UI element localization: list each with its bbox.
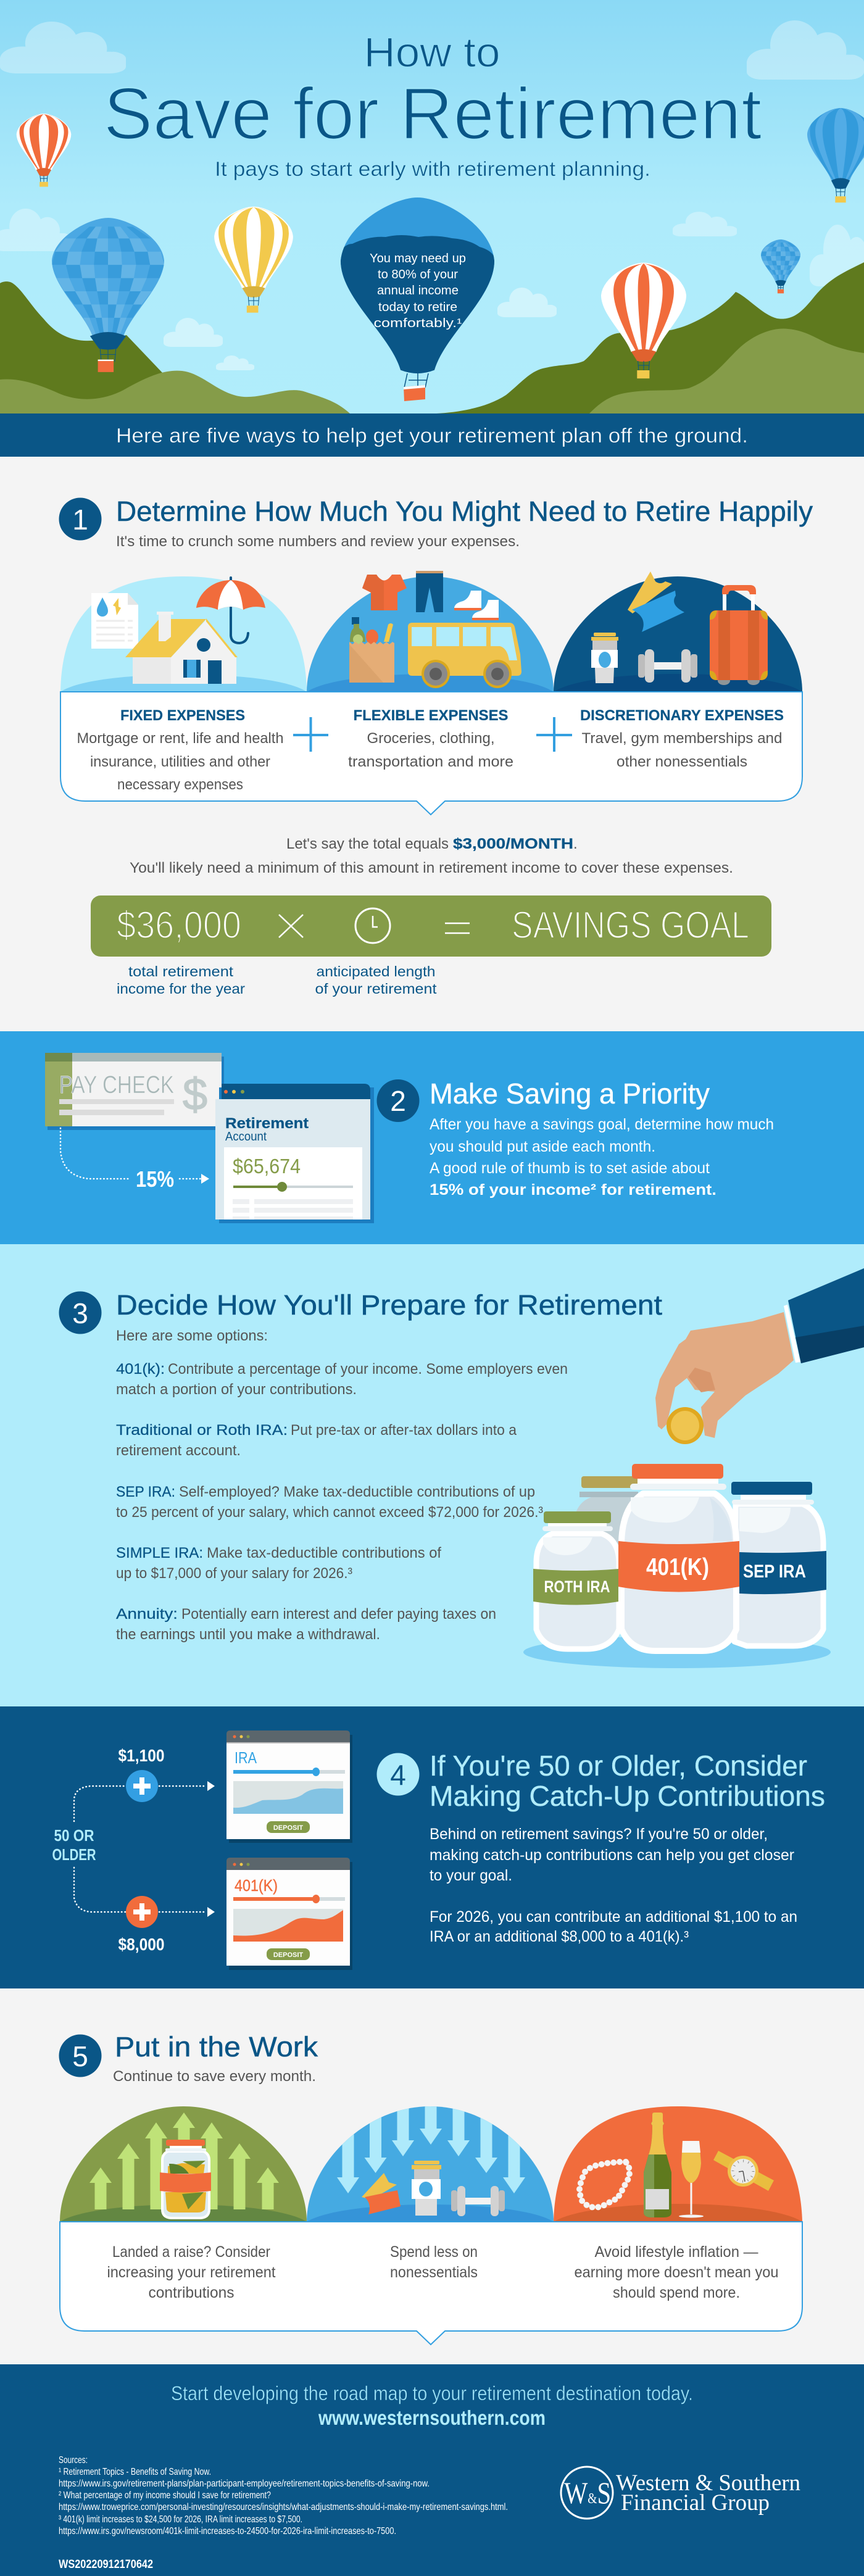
option: 401(k): Contribute a percentage of your income. Some employers even	[168, 1361, 568, 1377]
logo	[561, 2467, 800, 2519]
panel: hero sky	[0, 0, 864, 413]
step 4 body: to your goal.	[430, 1867, 512, 1884]
step 1 subheading: It's time to crunch some numbers and review your expenses.	[116, 533, 520, 550]
flexible expenses text: transportation and more	[348, 754, 513, 770]
jar: 401(k): 401(K)	[646, 1554, 709, 1581]
sources: https://www.irs.gov/newsroom/401k-limit-increases-to-24500-for-2026-ira-limit-increases-to-7500.	[59, 2526, 396, 2537]
balloon: yellow stripes	[215, 207, 292, 313]
sources: ² What percentage of my income should I save for retirement?	[59, 2490, 271, 2501]
savings goal formula bar	[91, 895, 771, 957]
tip: lifestyle inflation: earning more doesn't mean you	[574, 2264, 779, 2281]
icon: tickets	[362, 2173, 401, 2214]
savings goal formula bar: SAVINGS GOAL	[512, 904, 749, 947]
caption: retirement length: of your retirement	[315, 981, 437, 997]
jar: SEP IRA	[731, 1482, 826, 1646]
panel: step 5	[59, 2034, 803, 2345]
step 5 number	[59, 2034, 101, 2077]
option: Annuity	[116, 1606, 496, 1643]
step 4 heading: Making Catch-Up Contributions	[430, 1780, 825, 1812]
flexible expenses text	[348, 707, 513, 770]
step 4 number	[376, 1753, 420, 1796]
step 3 subheading: Here are some options:	[116, 1327, 268, 1344]
step 3 number: 3	[72, 1297, 88, 1329]
icon: grocery bag	[349, 617, 394, 683]
step 5 number: 5	[72, 2040, 88, 2072]
total explanation: $3,000/MONTH	[453, 836, 573, 852]
tip: spend less	[390, 2243, 478, 2281]
retirement account window: Account	[225, 1130, 267, 1144]
cloud far right	[810, 225, 864, 286]
banner: Here are five ways to help get your retirement plan off the ground.	[116, 424, 748, 447]
icon: bus	[408, 623, 521, 688]
step 2 body: 15% of your income² for retirement.	[430, 1181, 717, 1199]
icon: champagne bottle	[644, 2113, 671, 2217]
icon: champagne glass	[679, 2141, 704, 2218]
dome: fixed expenses	[60, 576, 307, 692]
icon: tickets	[628, 571, 684, 632]
fixed expenses text	[77, 707, 284, 793]
cloud top right	[747, 20, 864, 80]
step 2 number: 2	[390, 1085, 406, 1117]
icon: orange plus	[126, 1896, 158, 1928]
dome: discretionary expenses	[554, 571, 802, 692]
website: www.westernsouthern.com	[318, 2406, 546, 2429]
step 1 number: 1	[72, 504, 88, 536]
panel: footer	[0, 2364, 864, 2576]
hill: right light	[589, 328, 864, 413]
option: Annuity: the earnings until you make a withdrawal.	[116, 1626, 380, 1643]
step 4 body: Behind on retirement savings? If you're 50 or older,	[430, 1826, 768, 1843]
balloon: large blue checker	[52, 218, 164, 372]
icon: times	[279, 915, 303, 937]
step 2 number	[376, 1079, 420, 1122]
icon: coffee cup	[591, 633, 618, 683]
icon: trousers	[416, 571, 443, 612]
step 3 number	[59, 1291, 101, 1334]
hill: left light	[0, 371, 350, 413]
option: SEP IRA: to 25 percent of your salary, which cannot exceed $72,000 for 2026.³	[116, 1504, 543, 1521]
balloon: central navy with text	[341, 197, 494, 401]
option: SIMPLE IRA: Make tax-deductible contributions of	[207, 1545, 441, 1561]
pay check illustration: $	[183, 1070, 207, 1120]
flexible expenses text: FLEXIBLE EXPENSES	[353, 707, 509, 724]
illustration: hand dropping coin	[655, 1268, 864, 1444]
icon: watch	[713, 2151, 774, 2191]
total explanation: You'll likely need a minimum of this amount in retirement income to cover these expenses.	[130, 860, 733, 876]
step 4 body: making catch-up contributions can help you get closer	[430, 1847, 794, 1864]
option: 401(k): match a portion of your contributions.	[116, 1381, 357, 1398]
balloon text: to 80% of your	[378, 268, 458, 281]
tip: spend less: nonessentials	[390, 2264, 478, 2281]
balloon: top right blue stripes	[807, 108, 864, 202]
total explanation: .	[573, 836, 578, 852]
label: 50 or older: 50 OR	[54, 1826, 94, 1845]
cloud centre right	[497, 288, 557, 317]
arrows: lower path	[74, 1868, 215, 1917]
step 2 body: A good rule of thumb is to set aside about	[430, 1160, 710, 1177]
document code: WS20220912170642	[59, 2558, 153, 2571]
option: Annuity: Potentially earn interest and defer paying taxes on	[181, 1606, 496, 1622]
logo: Financial Group	[621, 2490, 770, 2516]
window: IRA	[226, 1730, 352, 1843]
balloon: large orange stripes	[602, 264, 685, 378]
balloon text: comfortably.¹	[374, 317, 462, 330]
hill: left dark	[0, 281, 164, 413]
step 4 body: For 2026, you can contribute an additional $1,100 to an	[430, 1908, 797, 1926]
call to action: Start developing the road map to your retirement destination today.	[171, 2382, 693, 2404]
sources	[59, 2455, 508, 2537]
step 4 heading: If You're 50 or Older, Consider	[430, 1750, 807, 1782]
sources: ¹ Retirement Topics - Benefits of Saving Now.	[59, 2467, 211, 2477]
jar: Roth IRA	[533, 1511, 619, 1649]
jar: Roth IRA: ROTH IRA	[544, 1577, 610, 1596]
icon: plus 1	[293, 717, 328, 752]
option: SEP IRA	[116, 1484, 543, 1521]
panel: step 2	[0, 1031, 864, 1244]
jar: 401(k)	[618, 1464, 739, 1651]
option: SEP IRA: Self-employed? Make tax-deductible contributions of up	[179, 1484, 535, 1500]
hill: right dark	[436, 262, 864, 413]
icon: coffee cup	[412, 2161, 441, 2216]
icon: dumbbell	[451, 2186, 505, 2216]
step 2 body: you should put aside each month.	[430, 1138, 655, 1155]
banner	[0, 413, 864, 457]
icon: clock	[355, 908, 390, 943]
dome: spend less	[307, 2098, 554, 2222]
step 1 number	[59, 497, 101, 541]
option: SIMPLE IRA: SIMPLE IRA:	[116, 1545, 203, 1561]
subtitle: It pays to start early with retirement planning.	[215, 157, 650, 180]
step 5 heading: Put in the Work	[115, 2031, 318, 2063]
discretionary expenses text: DISCRETIONARY EXPENSES	[580, 707, 784, 724]
arrow: paycheck to account	[60, 1128, 209, 1184]
total explanation	[130, 836, 733, 876]
step 4 body: IRA or an additional $8,000 to a 401(k).³	[430, 1928, 689, 1945]
option: SEP IRA: SEP IRA:	[116, 1484, 175, 1500]
tips card	[60, 2222, 802, 2345]
option: 401(k): 401(k):	[116, 1361, 165, 1377]
jar: back	[573, 1476, 639, 1561]
sources: Sources:	[59, 2455, 88, 2466]
icon: blue plus	[126, 1770, 158, 1802]
discretionary expenses text	[580, 707, 784, 770]
panel: step 1	[0, 457, 864, 1031]
panel: step 3	[0, 1244, 864, 1706]
sources: ³ 401(k) limit increases to $24,500 for 2026, IRA limit increases to $7,500.	[59, 2514, 302, 2525]
option: SIMPLE IRA	[116, 1545, 441, 1582]
step 2 body	[430, 1116, 774, 1199]
step 1 heading: Determine How Much You Might Need to Retire Happily	[116, 496, 813, 527]
retirement account window	[215, 1084, 374, 1223]
window: 401(k): DEPOSIT	[273, 1951, 303, 1959]
tip: raise	[107, 2243, 276, 2301]
window: IRA: DEPOSIT	[273, 1824, 303, 1832]
caption: yearly income	[117, 963, 245, 997]
icon: pearl necklace	[579, 2162, 629, 2208]
down arrows	[337, 2098, 525, 2193]
icon: suitcase	[710, 585, 768, 685]
cloud top left	[0, 22, 126, 73]
cloud mid right	[673, 212, 737, 236]
window: IRA: IRA	[235, 1748, 257, 1767]
step 4 body	[430, 1826, 797, 1945]
savings goal formula bar: $36,000	[117, 904, 241, 947]
balloon: small orange stripes	[17, 114, 70, 187]
balloon text: You may need up	[370, 252, 466, 265]
pay check illustration	[45, 1053, 224, 1130]
flexible expenses text: Groceries, clothing,	[367, 730, 495, 747]
step 3 heading: Decide How You'll Prepare for Retirement	[116, 1289, 663, 1321]
logo: Western & Southern	[616, 2470, 800, 2496]
cloud mid left	[0, 209, 72, 251]
caption: retirement length	[315, 963, 437, 997]
title: Save for Retirement	[104, 73, 762, 155]
icon: house	[125, 612, 238, 684]
tip: raise: Landed a raise? Consider	[112, 2243, 270, 2261]
amount: 1100: $1,100	[118, 1746, 164, 1765]
fixed expenses text: necessary expenses	[117, 776, 243, 793]
step 2 body: After you have a savings goal, determine how much	[430, 1116, 774, 1133]
15 percent label: 15%	[136, 1166, 174, 1192]
title	[104, 29, 762, 155]
discretionary expenses text: other nonessentials	[617, 754, 747, 770]
icon: umbrella	[196, 578, 265, 643]
tip: lifestyle inflation: Avoid lifestyle inflation —	[595, 2243, 758, 2261]
sources: https://www.irs.gov/retirement-plans/plan-participant-employee/retirement-topics-benefits-of-saving-now.	[59, 2478, 430, 2489]
step 4 heading	[430, 1750, 825, 1812]
icon: money jar	[160, 2140, 211, 2218]
fixed expenses text: insurance, utilities and other	[90, 754, 270, 770]
total explanation: Let's say the total equals	[286, 836, 449, 852]
tip: lifestyle inflation	[574, 2243, 779, 2301]
balloon text	[370, 252, 466, 330]
discretionary expenses text: Travel, gym memberships and	[581, 730, 783, 747]
logo: W&S	[564, 2475, 611, 2510]
icon: dumbbell	[638, 649, 697, 683]
fixed expenses text: Mortgage or rent, life and health	[77, 730, 284, 747]
dome: lifestyle	[554, 2106, 802, 2222]
option: SIMPLE IRA: up to $17,000 of your salary for 2026.³	[116, 1565, 352, 1582]
dome: flexible expenses	[307, 571, 554, 692]
cloud centre left	[164, 318, 223, 347]
amount: 8000: $8,000	[118, 1935, 164, 1954]
sources: https://www.troweprice.com/personal-investing/resources/insights/what-adjustments-should-i-make-my-retirement-savings.html.	[59, 2502, 508, 2512]
caption: yearly income: total retirement	[128, 963, 234, 979]
dome: raise	[60, 2106, 307, 2222]
tip: raise: increasing your retirement	[107, 2264, 276, 2281]
up arrows	[89, 2113, 279, 2209]
expense card	[60, 692, 802, 815]
option: Traditional or Roth IRA	[116, 1422, 517, 1459]
cloud small	[216, 355, 254, 370]
icon: boots	[454, 591, 499, 620]
retirement account window: Retirement	[225, 1115, 309, 1132]
panel: step 4	[0, 1706, 864, 1988]
option: Annuity: Annuity:	[116, 1606, 178, 1622]
caption: retirement length: anticipated length	[316, 963, 436, 979]
pay check illustration: PAY CHECK	[59, 1071, 174, 1099]
label: 50 or older	[52, 1826, 96, 1864]
step 4 number: 4	[390, 1759, 406, 1791]
balloon: small blue checker	[761, 239, 800, 293]
balloon text: annual income	[377, 284, 459, 297]
option: Traditional or Roth IRA: retirement account.	[116, 1442, 241, 1459]
jar: SEP IRA: SEP IRA	[743, 1561, 806, 1582]
arrows: upper path	[74, 1781, 215, 1821]
icon: bill document	[91, 593, 138, 649]
option: Traditional or Roth IRA: Put pre-tax or after-tax dollars into a	[291, 1422, 517, 1439]
icon: equals	[445, 923, 470, 933]
window: 401(k): 401(K)	[235, 1876, 278, 1895]
icon: plus 2	[536, 717, 572, 752]
fixed expenses text: FIXED EXPENSES	[120, 707, 245, 724]
balloon text: today to retire	[378, 301, 457, 314]
option: 401(k)	[116, 1361, 568, 1398]
caption: yearly income: income for the year	[117, 981, 245, 997]
title: How to	[364, 29, 500, 76]
option: Traditional or Roth IRA: Traditional or Roth IRA:	[116, 1422, 288, 1439]
illustration: jars	[523, 1464, 831, 1668]
tip: spend less: Spend less on	[390, 2243, 478, 2261]
label: 50 or older: OLDER	[52, 1845, 96, 1864]
tip: lifestyle inflation: should spend more.	[613, 2284, 740, 2301]
step 2 heading: Make Saving a Priority	[430, 1078, 710, 1110]
tip: raise: contributions	[148, 2284, 235, 2301]
window: 401(k)	[226, 1858, 352, 1970]
step 5 subheading: Continue to save every month.	[113, 2068, 316, 2085]
icon: shirt	[362, 575, 407, 610]
retirement account window: $65,674	[233, 1155, 301, 1178]
